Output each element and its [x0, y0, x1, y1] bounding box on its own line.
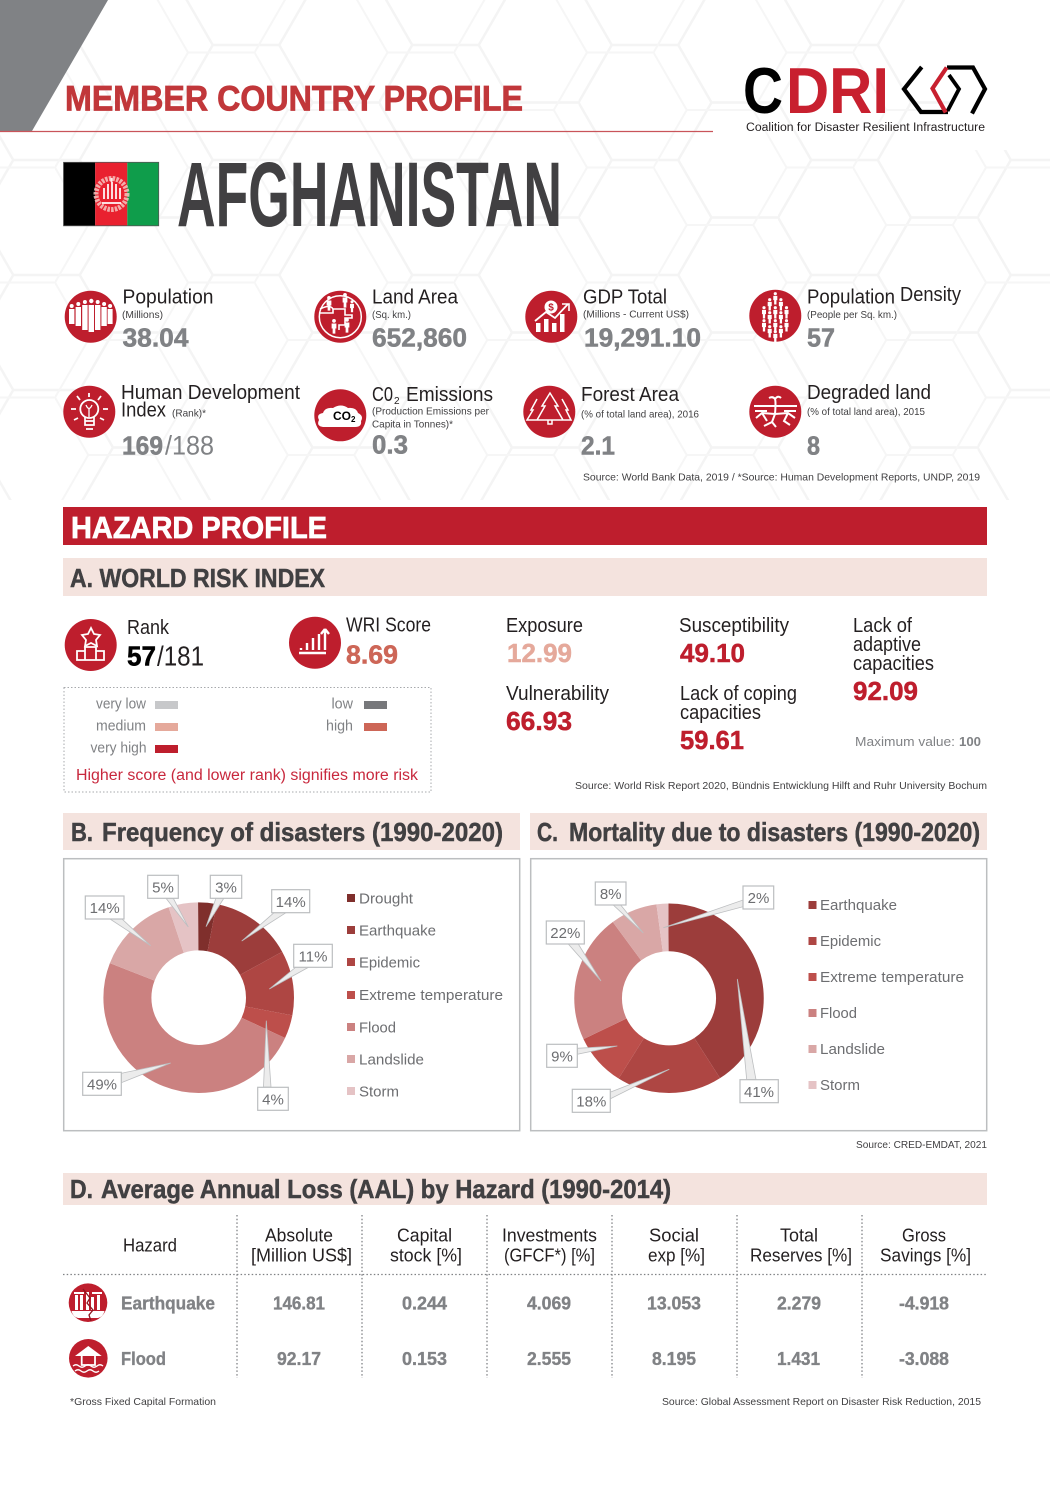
table row: flood: 0.153: [402, 1349, 447, 1369]
flag emblem: [96, 178, 127, 210]
metric: exposure: Exposure: [506, 615, 583, 637]
donut: mortality shares: [598, 927, 740, 1069]
stat: CO2 emissions: 2: [351, 415, 356, 424]
heading: average annual loss: Average Annual Loss (AAL) by Hazard (1990-2014): [101, 1174, 671, 1204]
table header row: Investments: [502, 1226, 597, 1246]
legend: mortality hazards: Landslide: [820, 1042, 885, 1058]
metric: exposure: [506, 615, 583, 668]
table header row: Social: [649, 1226, 699, 1246]
country name: AFGHANISTAN: [177, 144, 562, 246]
legend: mortality hazards: Storm: [820, 1078, 860, 1094]
stat: population density: [749, 284, 961, 353]
callouts: mortality percentages: 8%: [600, 886, 622, 903]
heading: average annual loss: [63, 1173, 987, 1205]
stat: population: (Millions): [122, 309, 163, 321]
source: stats: Source: World Bank Data, 2019 / *Source: Human Development Reports, UNDP, 2019: [583, 472, 980, 484]
table row: earthquake: 4.069: [527, 1293, 571, 1313]
panel: frequency donut chart: [64, 859, 520, 1131]
stat: population density: Density: [900, 284, 961, 306]
title: member country profile: MEMBER COUNTRY PROFILE: [65, 80, 523, 119]
legend: frequency hazards: Flood: [359, 1020, 396, 1036]
logo: CDRI: DRI: [786, 54, 889, 127]
stat: degraded land: [749, 382, 931, 460]
table row: flood: 8.195: [652, 1349, 696, 1369]
callouts: frequency percentages: 11%: [299, 948, 327, 966]
metric: lack of coping capacities: 59.61: [680, 725, 744, 755]
metric: lack of adaptive capacities: Lack of: [853, 615, 912, 637]
legend: mortality hazards: Epidemic: [820, 934, 881, 950]
table row: flood: 92.17: [277, 1349, 321, 1369]
header rule: [0, 130, 713, 132]
table row: earthquake: -4.918: [899, 1293, 949, 1313]
table header row: exp [%]: [648, 1246, 705, 1266]
stat: degraded land: (% of total land area), 2015: [807, 406, 925, 418]
stat: human development index: /188: [165, 430, 214, 460]
callouts: frequency percentages: 49%: [87, 1076, 117, 1094]
table row: earthquake: 0.244: [402, 1293, 447, 1313]
callouts: frequency percentages: 14%: [276, 894, 306, 911]
stat: land area: [314, 286, 467, 353]
stat: GDP total: [525, 286, 701, 353]
heading: frequency of disasters: Frequency of disasters (1990-2020): [102, 817, 503, 847]
legend: frequency hazards: Drought: [359, 892, 413, 908]
stat: CO2 emissions: 2: [394, 396, 400, 407]
legend: mortality hazards: Extreme temperature: [820, 970, 964, 986]
maximum value note: 100: [959, 734, 981, 749]
metric: lack of coping capacities: Lack of coping: [680, 683, 797, 705]
stat: forest area: 2.1: [581, 430, 615, 460]
table row: earthquake: 146.81: [273, 1293, 325, 1313]
metric: lack of adaptive capacities: adaptive: [853, 634, 921, 656]
legend: risk classes: high: [326, 719, 353, 735]
table header row: Hazard: [123, 1236, 177, 1256]
table header row: (GFCF*) [%]: [504, 1246, 595, 1266]
legend: frequency hazards: Extreme temperature: [359, 988, 503, 1004]
rank: 57: [127, 641, 156, 672]
panel: mortality donut chart: [531, 859, 987, 1131]
stat: human development index: Index: [121, 399, 166, 421]
heading: mortality due to disasters: C.: [537, 817, 558, 847]
WRI score: 8.69: [346, 639, 398, 669]
source: world risk report: Source: World Risk Report 2020, Bündnis Entwicklung Hilft and Ruhr University Bochum: [575, 780, 987, 792]
logo: CDRI: [743, 54, 985, 134]
table header row: Gross: [902, 1226, 946, 1246]
metric: vulnerability: [506, 683, 609, 736]
metric: susceptibility: [679, 615, 789, 668]
stat: human development index: 169: [122, 430, 163, 460]
legend: risk classes: Higher score (and lower rank) signifies more risk: [76, 767, 418, 784]
stat: GDP total: GDP Total: [583, 286, 667, 308]
stat: GDP total: $: [548, 302, 554, 314]
stat: human development index: [63, 382, 300, 460]
stat: CO2 emissions: C0: [372, 384, 393, 406]
stat: GDP total: 19,291.10: [584, 323, 701, 353]
stat: CO2 emissions: [314, 384, 493, 459]
metric: susceptibility: Susceptibility: [679, 615, 789, 637]
stat: population density: Population: [807, 286, 895, 308]
table header row: Total: [780, 1226, 818, 1246]
metric: exposure: 12.99: [507, 638, 572, 668]
table header row: Absolute: [265, 1226, 333, 1246]
callouts: mortality percentages: 41%: [744, 1084, 774, 1101]
table header row: Capital: [397, 1226, 452, 1246]
legend: mortality hazards: Earthquake: [820, 898, 897, 914]
footnote: *Gross Fixed Capital Formation: [70, 1396, 216, 1408]
legend: mortality hazards: [808, 898, 964, 1094]
callouts: frequency percentages: 4%: [262, 1092, 284, 1108]
legend: mortality hazards: Flood: [820, 1006, 857, 1022]
logo: CDRI: C: [743, 54, 783, 127]
table row: flood: Flood: [121, 1349, 166, 1369]
stat: human development index: (Rank)*: [172, 407, 206, 419]
table header row: Reserves [%]: [750, 1246, 852, 1266]
legend: risk classes: low: [332, 696, 354, 712]
source: CRED-EMDAT: Source: CRED-EMDAT, 2021: [856, 1139, 987, 1151]
stat: forest area: [523, 384, 699, 460]
table row: earthquake: 13.053: [647, 1293, 701, 1313]
stat: population: [65, 286, 214, 353]
heading: hazard profile: HAZARD PROFILE: [71, 510, 327, 545]
legend: risk classes: very high: [90, 741, 146, 757]
stat: land area: 652,860: [372, 323, 467, 353]
callouts: mortality percentages: 2%: [748, 890, 769, 907]
stat: population: 38.04: [122, 323, 189, 353]
header corner shape: [0, 0, 108, 131]
heading: mortality due to disasters: Mortality due to disasters (1990-2020): [569, 817, 980, 847]
table row: earthquake: 2.279: [777, 1293, 821, 1313]
table row: earthquake: [69, 1283, 949, 1322]
WRI score: [289, 615, 431, 669]
stat: CO2 emissions: (Production Emissions per: [372, 405, 489, 417]
table: average annual loss: [63, 1215, 987, 1378]
maximum value note: Maximum value:: [855, 734, 955, 749]
donut: frequency shares: [127, 926, 270, 1069]
legend: frequency hazards: Landslide: [359, 1052, 424, 1068]
table row: flood: 2.555: [527, 1349, 571, 1369]
stat: CO2 emissions: 0.3: [372, 429, 408, 459]
stat: human development index: Human Development: [121, 382, 300, 404]
metric: lack of adaptive capacities: 92.09: [853, 676, 918, 706]
callouts: mortality percentages: 18%: [576, 1094, 606, 1110]
metric: lack of adaptive capacities: capacities: [853, 653, 934, 675]
flag of Afghanistan: [64, 162, 159, 226]
metric: susceptibility: 49.10: [680, 638, 745, 668]
callouts: mortality percentages: [546, 882, 778, 1112]
stat: land area: (Sq. km.): [372, 309, 411, 321]
stat: population density: 57: [807, 323, 835, 353]
metric: lack of coping capacities: capacities: [680, 702, 761, 724]
stat: CO2 emissions: CO: [333, 409, 351, 423]
legend: risk classes: medium: [96, 719, 146, 735]
stat: degraded land: 8: [807, 430, 820, 460]
WRI score: WRI Score: [346, 615, 431, 637]
table header row: stock [%]: [390, 1246, 462, 1266]
table row: flood: 1.431: [777, 1349, 820, 1369]
metric: lack of adaptive capacities: [853, 615, 934, 706]
callouts: frequency percentages: 3%: [215, 880, 237, 896]
legend: risk classes: [64, 688, 431, 792]
heading: world risk index: [63, 558, 987, 596]
legend: frequency hazards: Storm: [359, 1084, 399, 1100]
table row: earthquake: Earthquake: [121, 1293, 215, 1313]
table row: flood: -3.088: [899, 1349, 949, 1369]
table row: flood: [69, 1339, 949, 1378]
metric: vulnerability: Vulnerability: [506, 683, 609, 705]
stat: degraded land: Degraded land: [807, 382, 931, 404]
legend: frequency hazards: [347, 892, 503, 1100]
callouts: mortality percentages: 9%: [551, 1048, 573, 1066]
stat: population: Population: [122, 286, 214, 308]
source: global assessment report: Source: Global Assessment Report on Disaster Risk Reduction, 2015: [662, 1396, 981, 1408]
callouts: frequency percentages: [83, 875, 332, 1110]
metric: vulnerability: 66.93: [506, 706, 572, 736]
legend: risk classes: very low: [96, 696, 146, 712]
heading: frequency of disasters: B.: [71, 817, 93, 847]
logo: CDRI: Coalition for Disaster Resilient Infrastructure: [746, 122, 985, 134]
heading: hazard profile: [63, 507, 987, 545]
table header row: Savings [%]: [880, 1246, 971, 1266]
table header row: [Million US$]: [251, 1246, 352, 1266]
legend: frequency hazards: Earthquake: [359, 924, 436, 940]
rank: [65, 617, 204, 672]
callouts: frequency percentages: 5%: [152, 880, 174, 896]
stat: GDP total: (Millions - Current US$): [583, 308, 689, 320]
legend: frequency hazards: Epidemic: [359, 956, 420, 972]
heading: world risk index: A. WORLD RISK INDEX: [70, 563, 326, 593]
rank: Rank: [127, 617, 170, 639]
stat: CO2 emissions: Emissions: [406, 384, 493, 406]
metric: lack of coping capacities: [680, 683, 797, 755]
heading: average annual loss: D.: [70, 1174, 93, 1204]
stat: CO2 emissions: Capita in Tonnes)*: [372, 419, 453, 431]
rank: /181: [157, 641, 204, 672]
table header row: [123, 1226, 971, 1266]
stat: land area: Land Area: [372, 286, 459, 308]
stat: forest area: Forest Area: [581, 384, 680, 406]
heading: mortality due to disasters: [530, 813, 987, 850]
stat: forest area: (% of total land area), 2016: [581, 409, 699, 421]
stat: population density: (People per Sq. km.): [807, 309, 897, 321]
callouts: mortality percentages: 22%: [550, 925, 580, 942]
callouts: frequency percentages: 14%: [90, 900, 120, 917]
